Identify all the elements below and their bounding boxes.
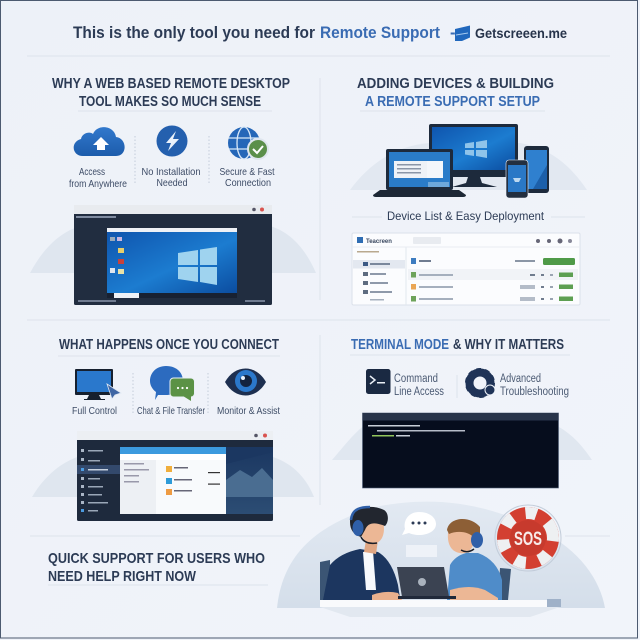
heading: why web based: TOOL MAKES SO MUCH SENSE (79, 94, 261, 110)
panel: web based remote desktop (30, 76, 316, 305)
heading: adding devices (357, 76, 554, 111)
label: secure and fast connection (220, 166, 275, 189)
icon: monitor with cursor (75, 369, 121, 400)
title: - (450, 24, 456, 42)
label: advanced troubleshooting: Advanced (500, 373, 541, 385)
title: This is the only tool you need for (73, 24, 316, 42)
browser: file manager session (77, 431, 273, 521)
backdrop arc (30, 226, 316, 273)
heading: terminal mode (350, 337, 570, 355)
label: no installation needed: No Installation (142, 166, 201, 178)
label: chat and file transfer: Chat & File Transfer (137, 405, 205, 417)
icon: globe with check (228, 127, 268, 159)
label: command line access: Line Access (394, 386, 444, 398)
heading: why web based (52, 76, 290, 111)
label: command line access: Command (394, 373, 438, 385)
panel: what happens once you connect (32, 337, 314, 521)
icon: monitor (429, 124, 518, 187)
label: advanced troubleshooting: Troubleshooting (500, 386, 569, 398)
icon: laptop (373, 149, 466, 197)
panel: terminal mode (332, 337, 592, 488)
icon: eye (225, 368, 266, 396)
heading: quick support: NEED HELP RIGHT NOW (48, 568, 197, 585)
label: command line access (394, 373, 444, 398)
title (73, 24, 456, 42)
heading: what happens: WHAT HAPPENS ONCE YOU CONNECT (59, 337, 279, 353)
heading: terminal mode: & WHY IT MATTERS (453, 337, 564, 353)
icon: SOS lifebuoy: SOS (514, 529, 542, 550)
title: Remote Support (320, 24, 440, 42)
icon: lightning bolt (156, 126, 188, 156)
icon: chat bubbles (150, 366, 194, 401)
illustration: support agent (320, 507, 402, 600)
icon: phones (506, 146, 549, 198)
logo: Getscreeen.me: Getscreeen.me (475, 25, 567, 41)
label: monitor and assist: Monitor & Assist (217, 405, 280, 417)
icon: laptop (397, 567, 456, 599)
label: advanced troubleshooting (500, 373, 569, 398)
label: no installation needed: Needed (156, 177, 188, 189)
icon: SOS lifebuoy (495, 505, 561, 571)
backdrop arc (32, 456, 314, 497)
icon: speech bubble (402, 512, 437, 557)
heading: adding devices: ADDING DEVICES & BUILDING (357, 76, 554, 92)
backdrop arc (350, 143, 587, 190)
label: access from anywhere (69, 166, 127, 190)
backdrop arc (277, 502, 605, 608)
illustration: user with laptop (447, 519, 511, 600)
panel: adding devices (350, 76, 587, 305)
device list panel (352, 233, 580, 305)
label: no installation needed (142, 166, 201, 189)
heading: quick support (48, 550, 268, 585)
icon: terminal prompt (366, 369, 390, 394)
label: access from anywhere: Access (79, 166, 105, 178)
device list panel: Teacreen (366, 239, 392, 245)
panel: quick support (48, 502, 605, 617)
heading: why web based: WHY A WEB BASED REMOTE DESKTOP (52, 76, 290, 92)
label: full control: Full Control (72, 405, 117, 417)
icon: cloud upload (74, 127, 125, 156)
subheading: device list: Device List & Easy Deployment (387, 209, 545, 223)
desk (320, 599, 561, 617)
browser: remote windows desktop (74, 205, 272, 305)
heading: quick support: QUICK SUPPORT FOR USERS WHO (48, 550, 265, 567)
label: secure and fast connection: Connection (225, 177, 271, 189)
label: secure and fast connection: Secure & Fast (220, 166, 275, 178)
heading: terminal mode: TERMINAL MODE (351, 337, 449, 353)
terminal window (362, 413, 558, 488)
heading: adding devices: A REMOTE SUPPORT SETUP (365, 94, 540, 110)
icon: gear (467, 370, 495, 396)
label: access from anywhere: from Anywhere (69, 178, 127, 190)
backdrop arc (332, 425, 592, 460)
